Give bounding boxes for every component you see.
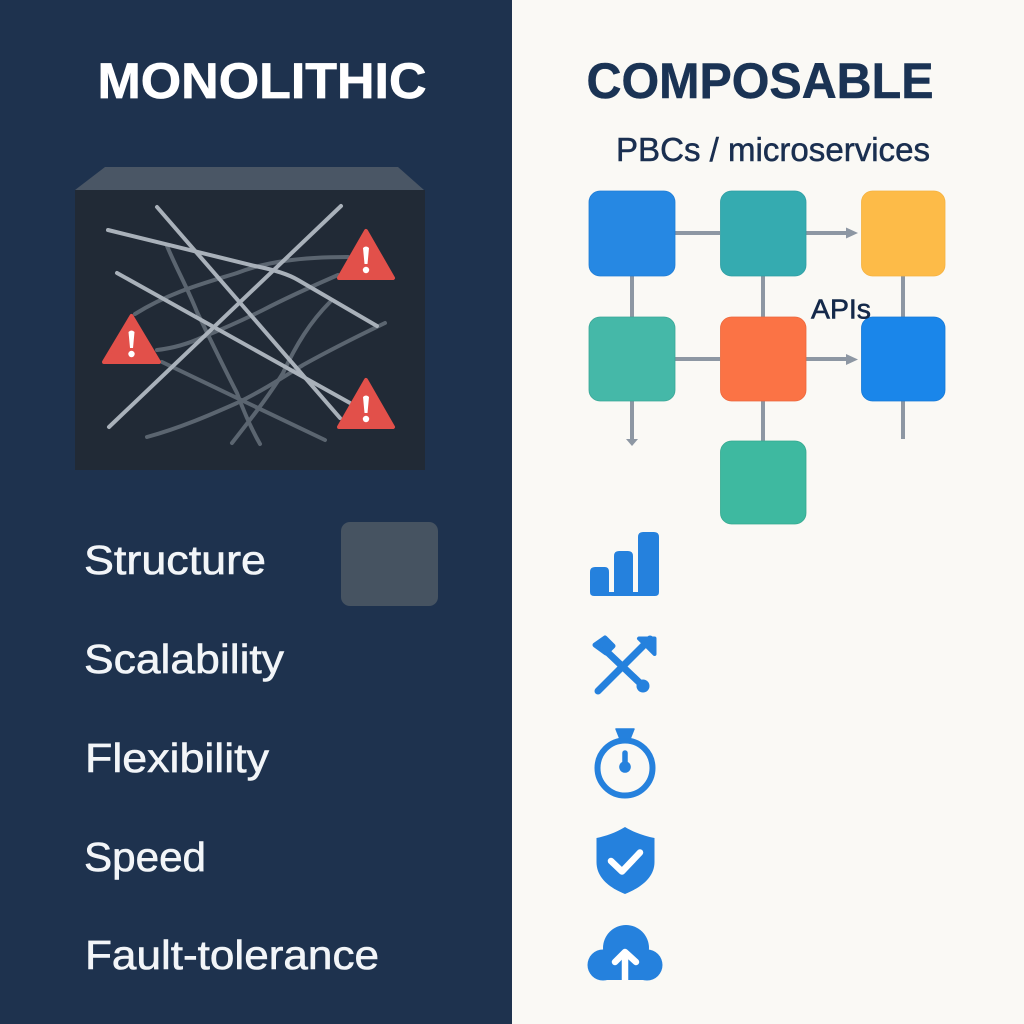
diagram: arrowheads [626,228,858,446]
diagram: connectors [632,233,903,441]
block: blue PBC [589,191,675,276]
block: bright blue PBC [862,317,945,401]
block: teal PBC [720,191,806,276]
label: flexibility: Flexibility [85,735,270,781]
heading: composable: COMPOSABLE [586,53,934,109]
icon: warning top right [339,231,393,278]
panel: monolithic [0,0,512,1024]
illustration: tangled monolith box [75,167,425,470]
icon: crossed arrow and hammer [595,638,654,692]
block: bottom green PBC [720,441,806,524]
block: green PBC [589,317,675,401]
label: APIs: APIs [811,294,871,324]
heading: monolithic: MONOLITHIC [98,53,426,109]
label: structure: Structure [84,537,266,583]
label: speed: Speed [84,834,206,880]
icon: shield with check [596,827,654,894]
icon: warning left [104,316,159,362]
label: fault-tolerance: Fault-tolerance [85,932,379,978]
label: scalability: Scalability [84,636,285,682]
icon: warning bottom right [339,380,393,427]
block: yellow PBC [862,191,945,276]
block: structure swatch [341,522,438,606]
block: orange PBC [720,317,806,401]
icon: stopwatch [598,729,652,796]
icon: cloud upload [588,925,662,980]
subheading: PBCs / microservices: PBCs / microservices [616,131,930,168]
icon: bar chart [590,532,659,596]
panel: composable [586,53,945,980]
